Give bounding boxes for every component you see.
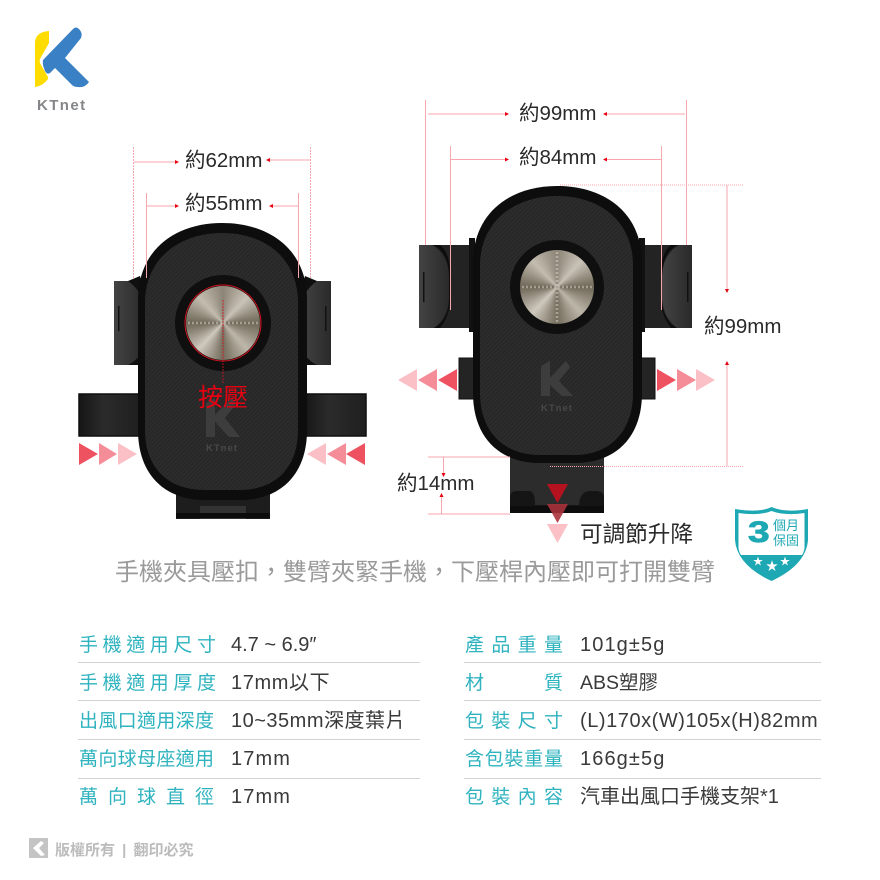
lower grip arms — [79, 394, 366, 436]
spec table: right — [464, 634, 821, 808]
row: material: ABS塑膠 — [580, 672, 658, 694]
metal button — [520, 250, 594, 324]
row: phone size: 4.7 ~ 6.9″ — [231, 634, 316, 656]
dimension: 62mm — [134, 147, 310, 278]
logo wordmark: KTnet — [37, 97, 86, 114]
row: phone thickness: 17mm以下 — [231, 672, 330, 694]
row: package contents: 汽車出風口手機支架*1 — [580, 785, 779, 808]
row: package size: 包裝尺寸 — [465, 710, 563, 732]
dimension: 84mm — [450, 146, 662, 310]
button ring — [175, 275, 271, 371]
height-adjust foot — [510, 453, 604, 513]
watermark logo: KTnet — [206, 443, 238, 454]
dimension: 99mm height: 約99mm — [704, 315, 781, 338]
logo mark yellow — [35, 31, 49, 87]
row: packaged weight: 含包裝重量 — [465, 748, 563, 770]
row: material: 材 質 — [465, 672, 563, 694]
dimension: 14mm — [397, 457, 510, 514]
row: vent depth — [79, 709, 406, 732]
caption: 手機夾具壓扣，雙臂夾緊手機，下壓桿內壓即可打開雙臂 — [115, 559, 715, 586]
badge text — [773, 518, 799, 548]
badge text: 個月 — [773, 518, 799, 533]
logo: KTnet — [35, 28, 89, 114]
row dividers — [464, 662, 821, 778]
dimension: 99mm height — [550, 185, 781, 466]
arrows: left holder squeeze from left — [79, 443, 137, 465]
row: phone thickness — [79, 672, 330, 694]
shield inner — [738, 511, 804, 555]
upper grip arms — [114, 276, 331, 365]
lower side tabs — [459, 358, 655, 399]
footer text: 版權所有 | 翻印必究 — [55, 841, 194, 859]
row: vent depth: 10~35mm深度葉片 — [231, 709, 406, 732]
spec table: left — [78, 634, 420, 808]
row: packaged weight — [465, 748, 665, 770]
arrows: right holder opening left — [398, 369, 457, 391]
dimension: 55mm — [146, 192, 298, 278]
row: ball diameter: 17mm — [231, 786, 291, 808]
upper extended arms — [419, 238, 692, 332]
row: phone thickness: 手機適用厚度 — [79, 672, 216, 694]
watermark logo — [541, 361, 573, 414]
arrows: left holder squeeze from right — [307, 443, 365, 465]
badge numeral: 3 — [748, 516, 770, 549]
label: press: 按壓 — [198, 384, 248, 412]
arrows: height adjust down — [547, 484, 568, 543]
badge stars: ★ — [766, 559, 778, 573]
row: product weight: 產品重量 — [465, 634, 563, 656]
textured panel — [145, 233, 298, 490]
logo mark blue — [43, 28, 89, 87]
button engraving — [188, 322, 258, 324]
row: vent depth: 出風口適用深度 — [79, 710, 214, 732]
dimension: 99mm width: 約99mm — [519, 102, 596, 125]
row: product weight — [465, 634, 665, 656]
footer logo — [29, 838, 48, 858]
row: product weight: 101g±5g — [580, 634, 665, 656]
dimension: 62mm: 約62mm — [185, 149, 262, 172]
row: package contents — [465, 785, 779, 808]
row: phone size: 手機適用尺寸 — [79, 634, 216, 656]
watermark logo — [206, 398, 240, 454]
textured panel — [480, 196, 633, 455]
footer copyright — [29, 838, 194, 859]
row: ball socket — [79, 748, 291, 770]
watermark logo: KTnet — [541, 403, 573, 414]
button engraving — [522, 252, 592, 322]
row: phone size — [79, 634, 316, 656]
row: ball diameter: 萬向球直徑 — [79, 786, 214, 808]
badge stars: ★ — [780, 557, 790, 568]
dimension: 84mm: 約84mm — [519, 146, 596, 169]
holder body — [138, 223, 307, 500]
arrows: right holder opening right — [657, 369, 715, 391]
badge stars: ★ — [753, 557, 763, 568]
row: package size: (L)170x(W)105x(H)82mm — [580, 710, 818, 732]
warranty badge — [735, 507, 808, 581]
row: ball socket: 萬向球母座適用 — [79, 748, 214, 770]
badge text: 保固 — [773, 533, 799, 548]
base foot — [176, 490, 270, 519]
row: packaged weight: 166g±5g — [580, 748, 665, 770]
row: package size — [465, 710, 818, 732]
press indicator — [185, 285, 261, 384]
row: ball diameter — [79, 786, 291, 808]
row: package contents: 包裝內容 — [465, 786, 563, 808]
row dividers — [78, 662, 420, 778]
product: right holder, open state — [419, 186, 692, 513]
dimension: 14mm: 約14mm — [397, 472, 474, 495]
row: ball socket: 17mm — [231, 748, 291, 770]
product: left holder, pressed state — [79, 223, 366, 519]
dimension: 99mm width — [426, 100, 686, 245]
holder body — [473, 186, 642, 463]
badge stars — [753, 557, 790, 573]
row: material — [465, 672, 658, 694]
shield outline — [735, 507, 808, 581]
button ring — [510, 240, 604, 334]
label: adjustable height: 可調節升降 — [580, 522, 693, 547]
metal button — [186, 286, 260, 360]
dimension: 55mm: 約55mm — [185, 192, 262, 215]
